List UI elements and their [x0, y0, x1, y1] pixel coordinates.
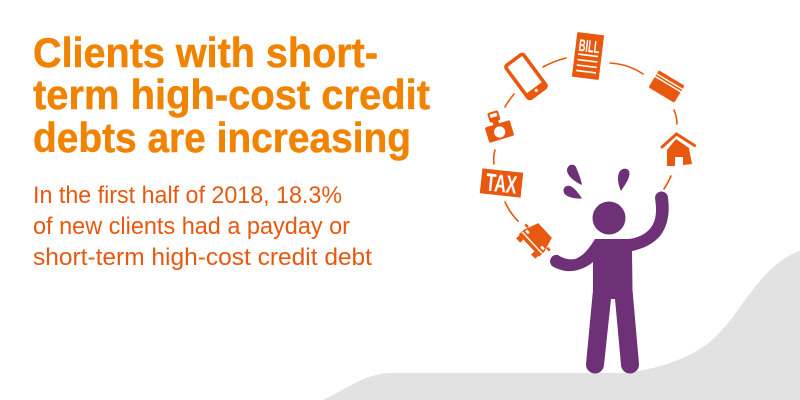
- juggling arcs: [494, 58, 677, 221]
- icon: tax sign: TAX: [485, 168, 518, 200]
- icon: camera: [481, 108, 514, 143]
- title: Clients with short-: [33, 29, 378, 76]
- description text: [33, 182, 372, 271]
- description text: short-term high-cost credit debt: [33, 244, 372, 271]
- head: [592, 202, 626, 234]
- title: debts are increasing: [33, 114, 411, 161]
- icon: house: [662, 134, 694, 166]
- icon: bill: [572, 32, 604, 80]
- icon: phone: [505, 53, 547, 100]
- ground hill: [323, 251, 800, 400]
- icon: car: [513, 217, 557, 262]
- title: term high-cost credit: [33, 71, 430, 118]
- icon: tax sign: [480, 168, 523, 200]
- title: [33, 29, 430, 161]
- body, arms and legs: [550, 192, 669, 374]
- description text: In the first half of 2018, 18.3%: [33, 182, 342, 209]
- icon: credit card: [648, 70, 685, 103]
- worry drops: [563, 165, 630, 199]
- description text: of new clients had a payday or: [33, 213, 350, 240]
- person figure: [550, 192, 669, 374]
- icon: bill: BILL: [578, 36, 601, 57]
